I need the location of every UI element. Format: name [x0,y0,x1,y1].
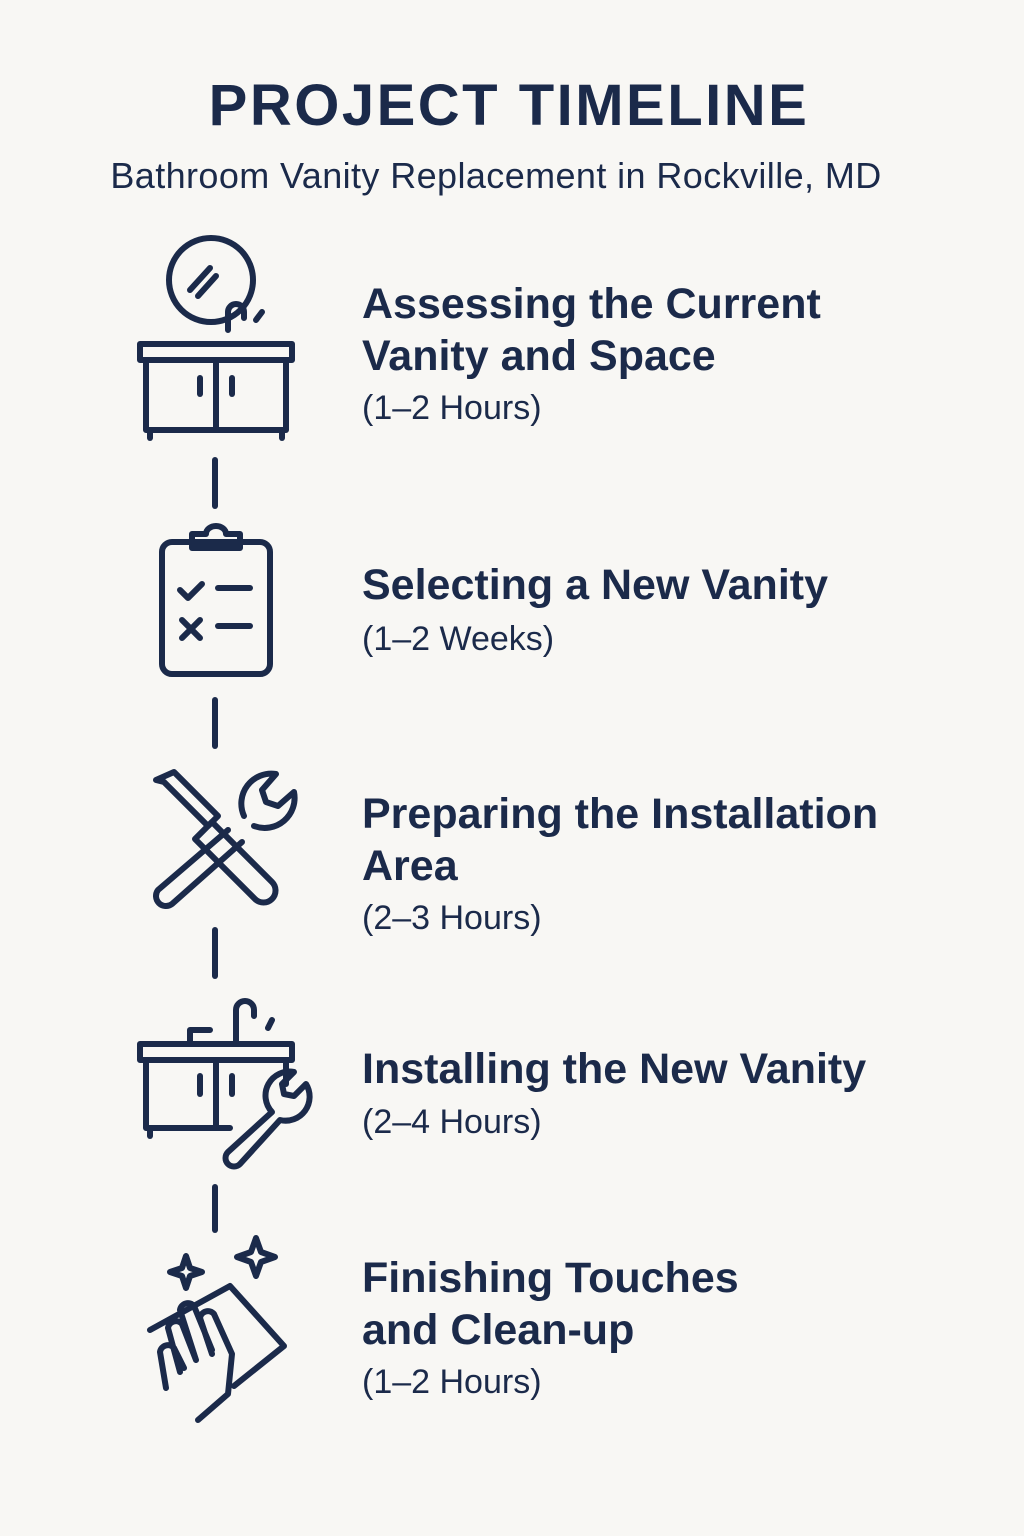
step 2 duration: (1–2 Weeks) [362,620,554,658]
title: PROJECT TIMELINE [209,73,809,138]
step 3 heading [362,790,878,890]
step 2 heading: Selecting a New Vanity [362,561,828,609]
icon: clipboard checklist [162,526,270,674]
step 4 heading: Installing the New Vanity [362,1045,866,1093]
step 3 heading: Area [362,842,458,890]
icon: hand cleaning with sparkles [150,1238,284,1420]
connector dashes [212,460,218,1230]
step 3 heading: Preparing the Installation [362,790,878,838]
step 5 duration: (1–2 Hours) [362,1363,542,1401]
icon: crossed tools [156,772,295,906]
step 5 heading [362,1254,739,1354]
step 1 heading [362,280,821,380]
step 1 heading: Assessing the Current [362,280,821,328]
step 5 heading: and Clean-up [362,1306,634,1354]
icon: vanity with mirror [140,238,292,438]
step 1 heading: Vanity and Space [362,332,716,380]
step 5 heading: Finishing Touches [362,1254,739,1302]
step 3 duration: (2–3 Hours) [362,899,542,937]
icon: vanity with wrench [140,1001,310,1166]
step 4 duration: (2–4 Hours) [362,1103,542,1141]
subtitle: Bathroom Vanity Replacement in Rockville, MD [110,155,882,196]
step 1 duration: (1–2 Hours) [362,389,542,427]
